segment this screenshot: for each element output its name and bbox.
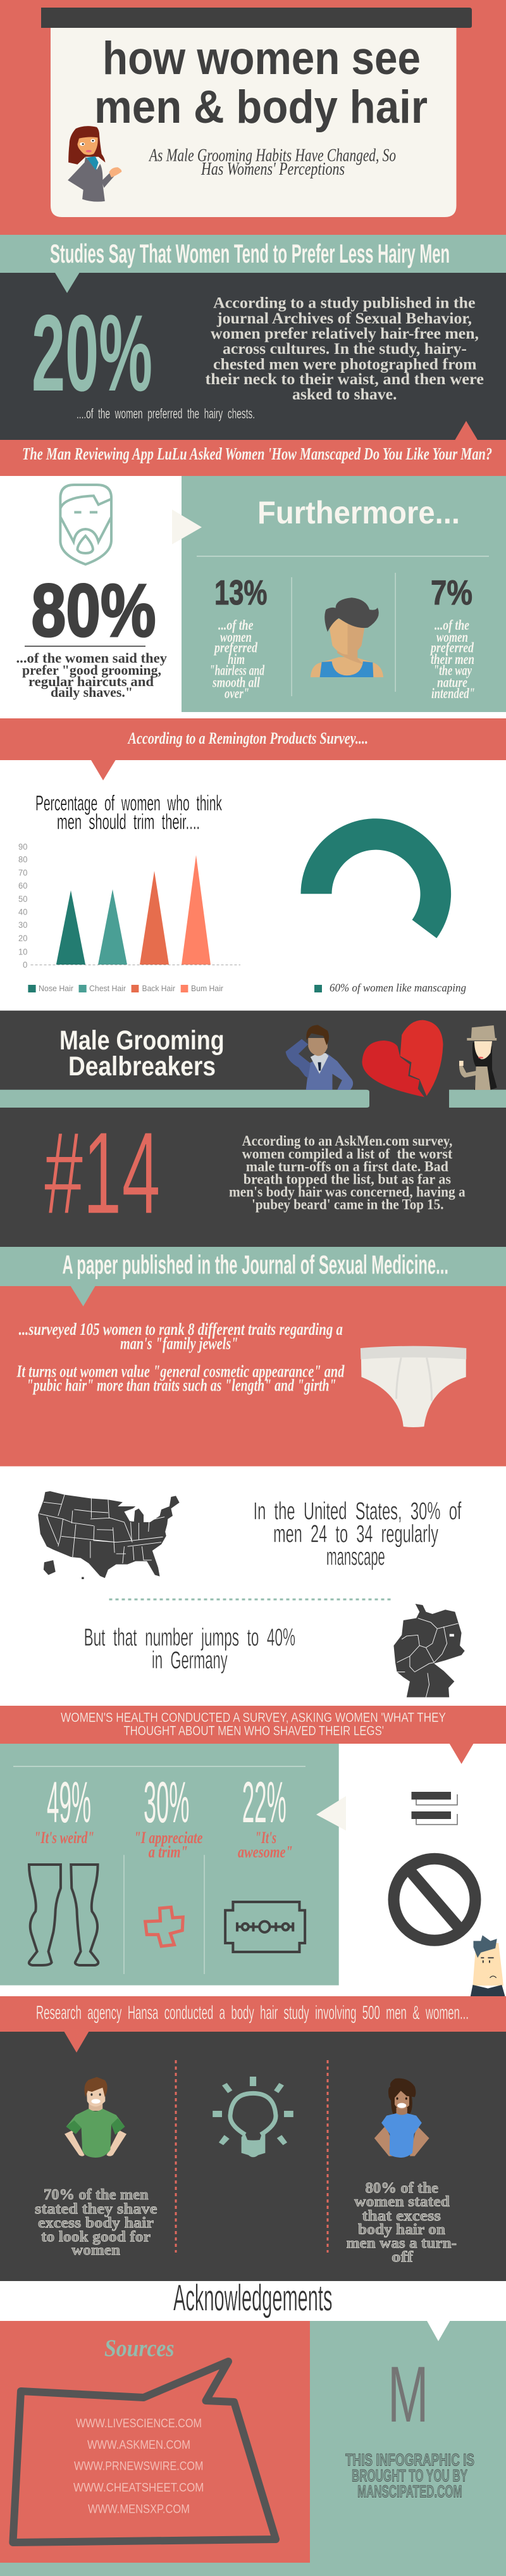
study text: journal Archives of Sexual Behavior, (216, 310, 472, 327)
survey text: According to an AskMen.com survey, (242, 1133, 452, 1149)
text: natural: ...of the (435, 617, 469, 633)
text: hairless: women (220, 629, 252, 645)
survey text: 'pubey beard' came in the Top 15. (252, 1197, 444, 1213)
Germany stat text (84, 1624, 295, 1674)
survey text (16, 1320, 345, 1395)
icon: broken heart (362, 1020, 443, 1097)
panel: leg shaving survey (0, 1706, 506, 1996)
chart legend (28, 984, 224, 993)
icon: man in green (65, 2077, 126, 2158)
heading: Dealbreakers (68, 1051, 216, 1082)
quote: trim: "I appreciate (134, 1829, 202, 1847)
icon: briefs (361, 1346, 466, 1427)
heading: Male Grooming (59, 1025, 225, 1056)
US stat text: manscape (326, 1544, 385, 1571)
grooming text: ...of the women said they (16, 650, 167, 666)
arrow left (316, 1796, 346, 1830)
text: men stat: women (71, 2242, 120, 2259)
quote: trim (134, 1829, 202, 1861)
ledge (0, 1090, 506, 1108)
subtitle: Has Womens' Perceptions (201, 159, 345, 179)
text: hairless: him (228, 651, 245, 667)
chart legend: Nose Hair (39, 984, 74, 993)
grooming text: prefer "good grooming, (22, 662, 161, 678)
panel: title header (0, 0, 506, 235)
survey text: "pubic hair" more than traits such as "length" and "girth" (27, 1376, 336, 1395)
panel: male grooming dealbreakers (0, 1011, 506, 1247)
chart title: Percentage of women who think (35, 792, 223, 816)
y axis labels: 70 (18, 867, 28, 877)
icon: legs (29, 1865, 98, 1965)
arrow up (455, 421, 478, 440)
survey text: ...surveyed 105 women to rank 8 different traits regarding a (19, 1320, 343, 1339)
panel: credits (0, 2320, 506, 2576)
panel: furthermore: Furthermore... (257, 495, 460, 530)
study text: asked to shave. (292, 386, 397, 403)
survey text: It turns out women value "general cosmetic appearance" and (16, 1362, 345, 1381)
chart legend: Back Hair (142, 984, 176, 993)
stat: 80%: 80% (32, 569, 156, 653)
text: women stat: that excess (362, 2208, 441, 2224)
icon: US map (38, 1491, 180, 1579)
bar chart (18, 842, 240, 970)
y axis labels: 20 (18, 933, 28, 943)
icon: razor blade (225, 1902, 305, 1952)
chart legend: Chest Hair (89, 984, 126, 993)
text: natural (429, 617, 475, 701)
study text: chested men were photographed from (213, 356, 477, 373)
y axis labels: 60 (18, 880, 28, 891)
y axis labels (18, 842, 28, 970)
heading band (0, 1706, 506, 1764)
subtitle (148, 146, 396, 179)
source list: WWW.CHEATSHEET.COM (73, 2482, 204, 2495)
credit text (345, 2451, 474, 2501)
icon: sad man (286, 1025, 353, 1090)
text: natural: their men (431, 651, 474, 667)
text: men stat (35, 2187, 157, 2259)
panel: hairy chest study (0, 235, 506, 440)
text: hairless: "hairless and (209, 663, 264, 678)
study text: their neck to their waist, and then were (205, 371, 484, 388)
stat: 20%: 20% (32, 292, 152, 414)
text: natural: "the way (433, 663, 472, 678)
quote: trim: a trim" (149, 1842, 188, 1861)
study text (205, 295, 484, 403)
panel: leg shaving survey: 49% (47, 1770, 91, 1835)
icon: woman in blue (374, 2079, 429, 2158)
text: natural: women (436, 629, 468, 645)
title: men & body hair (94, 82, 428, 133)
source list: WWW.MENSXP.COM (88, 2503, 190, 2517)
panel: leg shaving survey: 22% (242, 1770, 287, 1835)
sources heading: Sources (104, 2335, 175, 2362)
icon: Germany map (393, 1604, 465, 1698)
icon: light bulb (213, 2077, 293, 2157)
teal panel (0, 1744, 339, 1985)
survey text: male turn-offs on a first date. Bad (246, 1159, 448, 1175)
heading band (0, 718, 506, 780)
study text: women prefer relatively hair-free men, (211, 325, 479, 342)
y axis labels: 90 (18, 842, 28, 852)
text: hairless (209, 617, 264, 701)
stat: #14: #14 (44, 1108, 161, 1239)
heading (59, 1025, 225, 1082)
arrow down (426, 2320, 450, 2341)
y axis labels: 10 (18, 946, 28, 956)
heading band (0, 1996, 506, 2053)
text: women stat: off (392, 2249, 414, 2265)
title card (51, 28, 457, 217)
quote: awesome (238, 1829, 293, 1861)
title (94, 33, 428, 133)
heading band (0, 1247, 506, 1306)
text: men stat: stated they shave (35, 2201, 157, 2218)
panel: Hansa study (0, 1996, 506, 2281)
source list (73, 2417, 204, 2517)
bar: nose hair (56, 891, 85, 965)
icon: no sign (393, 1859, 476, 1941)
text: natural: preferred (429, 640, 474, 656)
text: natural: intended" (431, 685, 475, 701)
icon: woman in hat (459, 1025, 497, 1090)
text: natural: nature (437, 675, 467, 691)
survey text (229, 1133, 466, 1213)
icon: layered bars (411, 1792, 457, 1825)
donut chart (300, 818, 451, 938)
panel: LuLu app survey (0, 440, 506, 712)
stat: 13%: 13% (214, 573, 267, 612)
title: how women see (102, 33, 421, 84)
source list: WWW.PRNEWSWIRE.COM (74, 2460, 203, 2473)
donut legend: 60% of women like manscaping (330, 982, 466, 994)
chart legend: Bum Hair (191, 984, 224, 993)
panel: furthermore (172, 476, 506, 712)
heading band (0, 440, 506, 476)
US stat text (253, 1498, 462, 1571)
panel: Remington survey (0, 718, 506, 994)
heading band: THOUGHT ABOUT MEN WHO SHAVED THEIR LEGS' (123, 1724, 384, 1739)
text: men stat: excess body hair (38, 2215, 154, 2231)
text: women stat: 80% of the (366, 2180, 438, 2196)
chart title (35, 792, 223, 834)
icon: presenting woman (68, 126, 121, 202)
survey text: man's "family jewels" (120, 1334, 238, 1353)
source list: WWW.ASKMEN.COM (87, 2439, 190, 2452)
y axis labels: 50 (18, 894, 28, 904)
icon: bearded face (60, 485, 111, 565)
speech bubble (13, 2361, 276, 2542)
study text: According to a study published in the (213, 295, 476, 312)
icon: plus (145, 1907, 183, 1946)
heading band: According to a Remington Products Survey.... (127, 729, 368, 747)
text: women stat: men was a turn- (347, 2235, 457, 2252)
grooming text: daily shaves." (51, 684, 133, 700)
bar: back hair (140, 871, 169, 965)
y axis labels: 0 (23, 960, 28, 970)
bar: chest hair (98, 889, 127, 965)
Germany stat text: in Germany (152, 1647, 228, 1674)
survey text: women compiled a list of the worst (242, 1146, 453, 1162)
text: women stat (347, 2180, 457, 2265)
panel: leg shaving survey: 30% (144, 1770, 190, 1835)
stat: 7%: 7% (431, 573, 472, 612)
quote: awesome: awesome" (238, 1842, 293, 1861)
text: hairless: smooth all (212, 675, 260, 691)
y axis labels: 30 (18, 920, 28, 930)
heading band (0, 235, 506, 293)
icon: man bust (311, 597, 383, 677)
panel: sources (0, 2321, 310, 2563)
caption: ....of the women preferred the hairy chests. (77, 406, 255, 422)
grooming text (16, 650, 167, 700)
text: men stat: to look good for (41, 2229, 151, 2245)
y axis labels: 40 (18, 907, 28, 917)
panel: US and Germany stats (38, 1491, 465, 1698)
icon: frowning man (471, 1935, 505, 1996)
heading: acknowledgements: Acknowledgements (173, 2278, 333, 2319)
Germany stat text: But that number jumps to 40% (84, 1624, 295, 1651)
bar: bum hair (182, 855, 211, 965)
subtitle: As Male Grooming Habits Have Changed, So (148, 146, 396, 166)
quote: weird: "It's weird" (34, 1829, 94, 1847)
text: women stat: women stated (354, 2194, 450, 2210)
chart title: men should trim their.... (57, 810, 200, 834)
text: hairless: preferred (213, 640, 257, 656)
text: women stat: body hair on (358, 2222, 445, 2238)
study text: across cultures. In the study, hairy- (223, 341, 467, 358)
text: men stat: 70% of the men (44, 2187, 149, 2203)
scroll bar (41, 8, 472, 28)
grooming text: regular haircuts and (28, 673, 154, 689)
quote: awesome: "It's (255, 1829, 276, 1847)
survey text: men's body hair was concerned, having a (229, 1184, 466, 1200)
text: hairless: over" (225, 685, 249, 701)
source list: WWW.LIVESCIENCE.COM (76, 2417, 202, 2430)
y axis labels: 80 (18, 854, 28, 864)
logo letter M: M (388, 2351, 429, 2439)
survey text: breath topped the list, but as far as (244, 1172, 451, 1187)
text: hairless: ...of the (218, 617, 253, 633)
panel: journal of sexual medicine (0, 1247, 506, 1466)
